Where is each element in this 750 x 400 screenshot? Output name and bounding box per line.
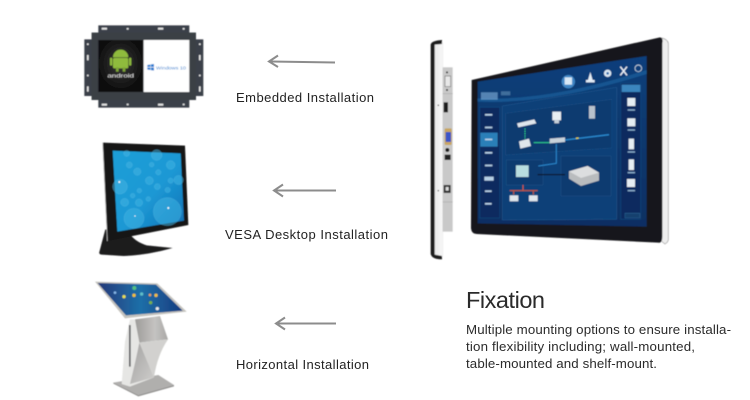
top toolbar icons [562,65,642,88]
text block: description: tion flexibility including; wall-mounted, [466,339,695,354]
text block: description [466,322,731,371]
arrow: VESA [274,184,336,196]
arrow: horizontal [276,318,336,330]
front view of main monitor [471,37,668,244]
kiosk screen [98,283,183,315]
dashboard screen [478,56,647,227]
right device panel [621,83,641,219]
android screen panel: android [107,73,134,79]
icon: horizontal kiosk [95,282,187,396]
icon: embedded open-frame monitor [84,25,203,108]
arrow: embedded [269,56,335,67]
logo area [481,92,498,100]
label: horizontal installation: Horizontal Installation [236,357,369,372]
central network diagram [502,87,617,220]
left menu [480,107,500,218]
windows screen panel: Windows 10 [156,65,186,71]
label: embedded installation: Embedded Installation [236,90,374,105]
heading: fixation: Fixation [466,287,545,313]
text block: description: table-mounted and shelf-mount. [466,356,657,371]
side view of monitor [431,40,453,259]
water-drop screen [113,150,184,232]
text block: description: Multiple mounting options to ensure installa- [466,322,731,337]
icon: VESA desktop monitor [99,143,188,256]
label: VESA desktop installation: VESA Desktop Installation [225,227,388,242]
